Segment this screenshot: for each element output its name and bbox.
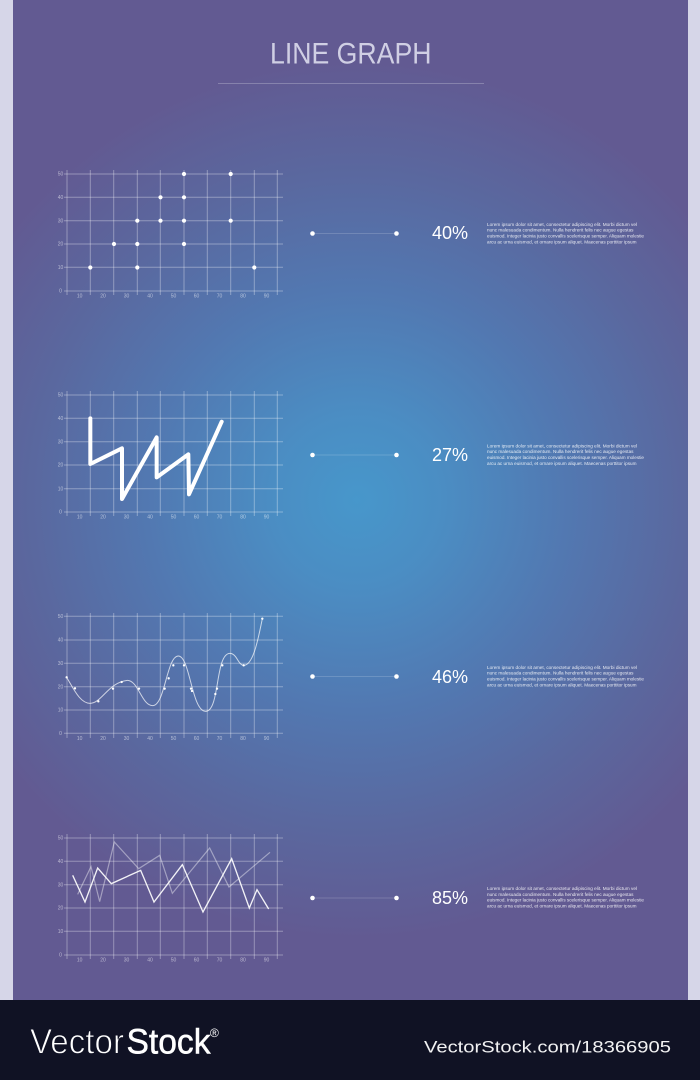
text block: arcu ac urna euismod, et ornare ipsum aliquet. Maecenas porttitor ipsum: [487, 682, 637, 688]
chart: two overlaid lines: 0: [59, 953, 62, 959]
chart: two overlaid lines: 80: [240, 958, 246, 964]
chart: two overlaid lines: 40: [58, 859, 63, 865]
chart: smooth curve: 50: [58, 614, 63, 620]
chart: two overlaid lines: 50: [58, 836, 63, 842]
chart: two overlaid lines: 30: [58, 882, 63, 888]
chart: bold zigzag line: 50: [58, 393, 63, 399]
footer logo: [30, 1022, 219, 1061]
chart: smooth curve: 70: [217, 736, 222, 742]
text block: Lorem ipsum dolor sit amet, consectetur adipiscing elit. Morbi dictum vel: [487, 443, 637, 448]
chart: smooth curve: 80: [240, 736, 246, 742]
chart: two overlaid lines: 10: [58, 929, 63, 935]
chart: bold zigzag line: 30: [124, 514, 129, 520]
footer bar: [0, 1000, 700, 1080]
connector with dots: [310, 453, 399, 457]
chart: two overlaid lines: 90: [264, 958, 269, 964]
connector with dots: [310, 674, 399, 679]
panel: bold line chart row: [58, 391, 644, 520]
chart: scatter plot: [58, 170, 283, 300]
chart: smooth curve: 10: [58, 708, 63, 714]
chart: smooth curve: 40: [147, 736, 153, 742]
text block: nunc malesuada condimentum. Nulla hendrerit felis nec augue egestas: [487, 228, 634, 233]
chart: bold zigzag line: 40: [58, 416, 63, 422]
chart: two overlaid lines: 40: [147, 958, 153, 964]
chart: two overlaid lines: 30: [124, 958, 129, 964]
chart: scatter plot: 70: [217, 294, 222, 300]
chart: scatter plot: 20: [100, 294, 106, 300]
percentage: 40%: [432, 223, 468, 243]
text block: [487, 222, 644, 244]
chart: bold zigzag line: 10: [58, 486, 63, 492]
chart: two overlaid lines: [58, 834, 283, 964]
chart: bold zigzag line: 40: [147, 514, 153, 520]
chart: bold zigzag line: 20: [100, 514, 106, 520]
chart: smooth curve: 0: [59, 731, 62, 737]
percentage: 46%: [432, 667, 468, 687]
chart: smooth curve: 20: [100, 736, 106, 742]
text block: arcu ac urna euismod, et ornare ipsum aliquet. Maecenas porttitor ipsum: [487, 240, 637, 244]
title: LINE GRAPH: [270, 37, 432, 70]
chart: scatter plot: 30: [58, 218, 63, 224]
chart: bold zigzag line: [58, 391, 283, 520]
chart: bold zigzag line: 30: [58, 439, 63, 445]
chart: two overlaid lines: 20: [58, 906, 63, 912]
chart: scatter plot: 80: [240, 294, 246, 300]
text block: arcu ac urna euismod, et ornare ipsum aliquet. Maecenas porttitor ipsum: [487, 461, 637, 466]
chart: scatter plot: 60: [194, 294, 199, 300]
panel: smooth curve chart row: [58, 613, 644, 742]
chart: scatter plot: 50: [58, 172, 63, 178]
panel: double line chart row: [58, 834, 644, 964]
text block: arcu ac urna euismod, et ornare ipsum aliquet. Maecenas porttitor ipsum: [487, 904, 637, 909]
text block: [487, 443, 644, 466]
chart: bold zigzag line: 60: [194, 514, 199, 520]
footer logo: ®: [210, 1026, 219, 1040]
text block: nunc malesuada condimentum. Nulla hendrerit felis nec augue egestas: [487, 671, 634, 676]
chart: bold zigzag line: 10: [77, 514, 83, 520]
chart: bold zigzag line: 90: [264, 514, 269, 520]
chart: scatter plot: 10: [77, 294, 83, 300]
text block: euismod. Integer lacinia justo convallis scelerisque semper. Aliquam molestie: [487, 676, 644, 682]
chart: two overlaid lines: 70: [217, 958, 222, 964]
chart: smooth curve: 90: [264, 736, 269, 742]
chart: two overlaid lines: 60: [194, 958, 199, 964]
chart: two overlaid lines: 20: [100, 958, 106, 964]
chart: smooth curve: 10: [77, 736, 83, 742]
text block: nunc malesuada condimentum. Nulla hendrerit felis nec augue egestas: [487, 449, 634, 454]
chart: smooth curve: 60: [194, 736, 199, 742]
chart: bold zigzag line: 80: [240, 514, 246, 520]
chart: scatter plot: 10: [58, 265, 63, 271]
text block: nunc malesuada condimentum. Nulla hendrerit felis nec augue egestas: [487, 892, 634, 897]
footer image id: VectorStock.com/18366905: [424, 1038, 671, 1056]
chart: scatter plot: 30: [124, 294, 129, 300]
text block: Lorem ipsum dolor sit amet, consectetur adipiscing elit. Morbi dictum vel: [487, 886, 637, 891]
text block: [487, 665, 644, 688]
chart: two overlaid lines: 50: [171, 958, 176, 964]
chart: scatter plot: 40: [58, 195, 63, 201]
connector with dots: [310, 231, 399, 236]
chart: two overlaid lines: 10: [77, 958, 83, 964]
chart: scatter plot: 0: [59, 289, 62, 295]
text block: euismod. Integer lacinia justo convallis scelerisque semper. Aliquam molestie: [487, 455, 644, 460]
chart: smooth curve: 20: [58, 684, 63, 690]
text block: Lorem ipsum dolor sit amet, consectetur adipiscing elit. Morbi dictum vel: [487, 665, 637, 670]
chart: bold zigzag line: 0: [59, 510, 62, 516]
chart: scatter plot: 50: [171, 294, 176, 300]
text block: Lorem ipsum dolor sit amet, consectetur adipiscing elit. Morbi dictum vel: [487, 222, 637, 227]
chart: smooth curve: [58, 613, 283, 742]
chart: scatter plot: 90: [264, 294, 269, 300]
chart: bold zigzag line: 50: [171, 514, 176, 520]
chart: scatter plot: 20: [58, 242, 63, 248]
percentage: 85%: [432, 888, 468, 908]
panel: scatter chart row: [58, 170, 644, 300]
chart: scatter plot: 40: [147, 294, 153, 300]
chart: smooth curve: 30: [124, 736, 129, 742]
text block: [487, 886, 644, 909]
chart: smooth curve: 30: [58, 661, 63, 667]
chart: smooth curve: 40: [58, 638, 63, 644]
connector with dots: [310, 896, 399, 900]
chart: bold zigzag line: 20: [58, 463, 63, 469]
text block: euismod. Integer lacinia justo convallis scelerisque semper. Aliquam molestie: [487, 234, 644, 238]
footer logo: Vector: [30, 1022, 124, 1061]
percentage: 27%: [432, 445, 468, 465]
text block: euismod. Integer lacinia justo convallis scelerisque semper. Aliquam molestie: [487, 898, 644, 903]
chart: smooth curve: 50: [171, 736, 176, 742]
footer logo: Stock: [126, 1022, 211, 1061]
chart: bold zigzag line: 70: [217, 514, 222, 520]
